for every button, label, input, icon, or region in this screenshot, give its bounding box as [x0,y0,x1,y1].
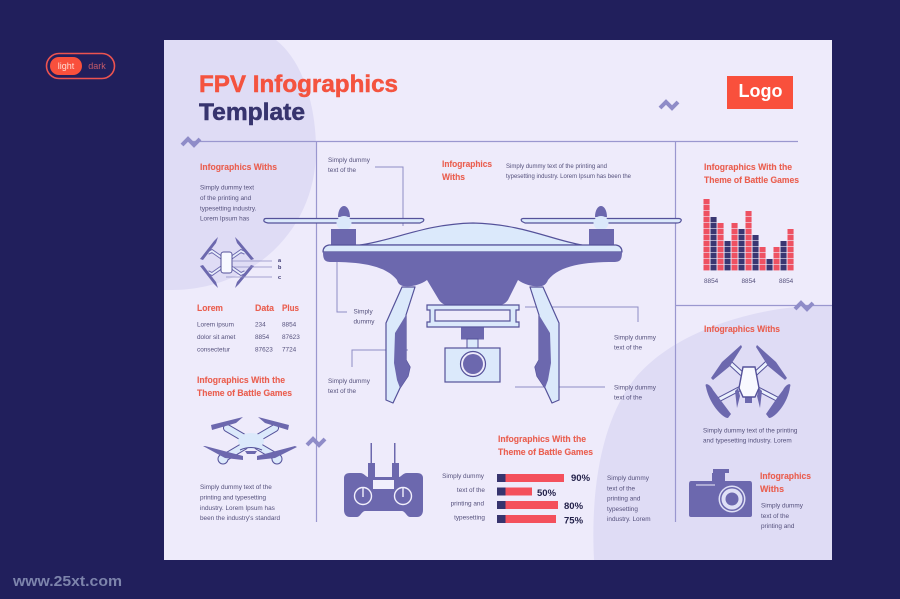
body text [703,428,798,444]
data table: 7724 [282,346,297,354]
zigzag markers [182,102,813,445]
bar labels: text of the [457,487,485,494]
side text: typesetting [607,506,638,513]
icon: remote controller [344,443,423,517]
axis labels: 8854 [779,278,794,285]
icon: small top-view drone: c [278,275,281,281]
axis labels [704,278,794,285]
body text: Lorem Ipsum has [200,216,249,222]
panel: right drone [703,324,798,444]
panel: main sheet [164,40,832,560]
icon: camera [689,469,752,517]
side text: printing and [607,496,641,502]
panel: bar stats [442,434,651,526]
panel: camera text: Withs [760,484,784,495]
callouts: text of the [328,167,357,174]
callouts: text of the [328,388,357,395]
icon: racing drone [706,345,790,418]
camera [445,348,500,382]
heading: Theme of Battle Games [498,447,593,458]
heading: Infographics With the [704,162,792,173]
panel: camera text: text of the [761,513,790,520]
body text [200,184,257,222]
heading [498,434,593,458]
panel: left intro [197,162,300,354]
panel: camera text: Simply dummy [761,502,804,510]
propellers [264,206,681,230]
heading: Infographics With the [197,375,285,386]
toggle: light / dark: dark [88,61,106,71]
gimbal [427,305,519,348]
title [199,71,398,126]
callouts: text of the [614,394,643,402]
side text: Simply dummy [607,475,650,482]
body text: Simply dummy text [200,184,254,192]
top centre text block: typesetting industry. Lorem Ipsum has been the [506,173,631,180]
body text: typesetting industry. [200,206,257,212]
title: Template [199,99,305,126]
top centre text block: Infographics [442,159,492,170]
data table: Lorem ipsum [197,322,234,328]
icon: quadcopter [203,417,297,464]
chart: main drone [264,167,681,403]
logo badge [727,76,793,109]
data table [197,303,300,354]
body text: industry. Lorem Ipsum has [200,505,275,512]
top centre text block: Withs [442,172,465,183]
top centre text block: Simply dummy text of the printing and [506,163,607,170]
icon: small top-view drone: a [278,258,282,264]
bar chart: 90% [571,473,591,484]
top centre text block [442,159,631,183]
drone body [323,223,622,305]
callouts: dummy [354,318,375,326]
data table: Lorem [197,303,223,314]
logo badge: Logo [739,81,782,101]
callouts: text of the [614,344,643,352]
data table: 234 [255,322,266,328]
heading: Infographics Withs [200,162,277,173]
side text: text of the [607,486,636,492]
title: FPV Infographics [199,71,398,98]
stacked cell columns [704,199,794,271]
body text: and typesetting industry. Lorem [703,438,792,444]
heading: Infographics Withs [704,324,780,335]
callouts: Simply [354,308,373,316]
data table: Plus [282,303,299,314]
heading [704,162,799,186]
heading [197,375,292,399]
callouts: Simply dummy [614,384,657,392]
panel: camera text [760,471,811,530]
panel: quadcopter [197,375,297,522]
toggle: light / dark: light [58,61,75,71]
data table: consectetur [197,346,231,354]
body text: been the industry's standard [200,515,281,522]
callouts: Simply dummy [328,157,371,164]
icon: small top-view drone: b [278,265,282,271]
bar labels: typesetting [454,514,485,522]
heading: Theme of Battle Games [704,175,799,186]
body text: Simply dummy text of the [200,484,272,491]
data table: Data [255,303,275,314]
body text: of the printing and [200,195,252,202]
panel: camera text: printing and [761,523,795,530]
panel: camera text: Infographics [760,471,811,482]
callouts: Simply dummy [328,378,371,385]
bar chart [497,473,591,526]
data table: 87623 [255,346,273,354]
panel: column chart [704,162,799,285]
icon: small top-view drone [200,237,282,288]
bar labels: Simply dummy [442,473,485,480]
legs [386,287,559,403]
callouts [328,157,657,402]
watermark: www.25xt.com [12,574,122,590]
axis labels: 8854 [704,278,719,285]
bar chart: 50% [537,488,557,499]
side text: industry. Lorem [607,516,651,523]
bar chart: 75% [564,516,584,526]
bar labels: printing and [451,500,484,508]
body text: Simply dummy text of the printing [703,428,798,434]
body text [200,484,281,522]
heading: Theme of Battle Games [197,388,292,399]
data table: 87623 [282,334,300,341]
body text: printing and typesetting [200,494,267,502]
bar labels [442,473,485,522]
data table: 8854 [255,334,270,341]
side text [607,475,651,523]
leader lines [337,167,638,387]
axis labels: 8854 [742,278,756,285]
toggle: light / dark [46,54,114,78]
bar chart: 80% [564,501,584,512]
data table: dolor sit amet [197,334,236,341]
callouts: Simply dummy [614,334,657,342]
motors [331,229,614,246]
data table: 8854 [282,322,297,328]
heading: Infographics With the [498,434,586,445]
